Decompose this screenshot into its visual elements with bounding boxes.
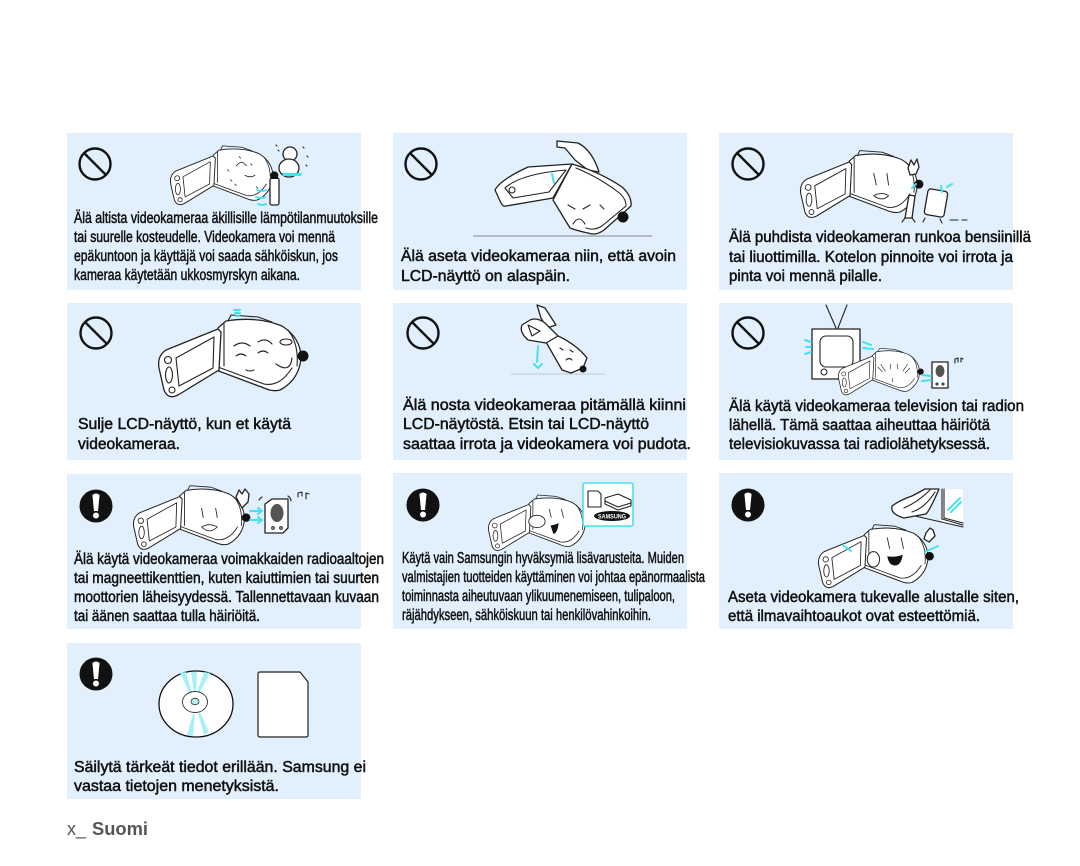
illustration: sleepy camera [159, 310, 308, 397]
text: caution 8: toiminnasta aiheutuvaan ylikuumenemiseen, tulipaloon, [402, 588, 675, 605]
icon: prohibition sign [732, 318, 764, 348]
illustration: memory card [258, 672, 308, 737]
text: caution 9 [728, 589, 1019, 625]
text: warning 1: epäkuntoon ja käyttäjä voi saada sähköiskun, jos [74, 248, 338, 265]
text: warning 6: Älä käytä videokameraa television tai radion [729, 398, 1024, 415]
text: warning 1: tai suurelle kosteudelle. Videokamera voi mennä [74, 229, 335, 246]
text: warning 3 [729, 229, 1031, 285]
illustration: camera with snowman and bottle [170, 145, 308, 205]
text: caution 7: tai äänen saattaa tulla häiriöitä. [74, 608, 260, 625]
text: warning 4: videokameraa. [78, 436, 180, 453]
icon: prohibition sign [406, 148, 436, 180]
text: warning 6: televisiokuvassa tai radiolähetyksessä. [729, 436, 990, 453]
footer: page label: Suomi [92, 819, 148, 839]
panel: approved accessories caution [393, 473, 705, 629]
text: warning 3: Älä puhdista videokameran runkoa bensiinillä [729, 229, 1031, 246]
text: warning 4: Sulje LCD-näyttö, kun et käytä [78, 416, 291, 433]
text: warning 5 [403, 397, 691, 453]
text: caution 8: Käytä vain Samsungin hyväksymiä lisävarusteita. Muiden [402, 550, 684, 567]
illustration: camera upside down on ground [473, 141, 652, 236]
icon: exclamation sign [406, 488, 440, 522]
icon: prohibition sign [80, 318, 112, 348]
illustration: disc [159, 671, 233, 737]
text: caution 7: tai magneettikenttien, kuten kaiuttimien tai suurten [74, 570, 379, 587]
text: caution 10: Säilytä tärkeät tiedot erillään. Samsung ei [74, 759, 366, 776]
text: caution 9: Aseta videokamera tukevalle alustalle siten, [728, 589, 1019, 606]
panel: lifting by LCD warning [393, 303, 691, 460]
illustration: camera with Samsung accessories: SAMSUNG [598, 514, 626, 520]
illustration: camera lifted by LCD [511, 305, 605, 374]
text: warning 2: Älä aseta videokameraa niin, että avoin [401, 248, 676, 265]
text: caution 8: valmistajien tuotteiden käyttäminen voi johtaa epänormaalista [402, 569, 705, 586]
illustration: camera with solvent bottles [801, 151, 967, 223]
illustration: camera with Samsung accessories [488, 483, 633, 550]
panel: temperature and humidity warning [67, 133, 378, 290]
text: warning 1: Älä altista videokameraa äkillisille lämpötilanmuutoksille [74, 210, 378, 227]
text: caution 7: moottorien läheisyydessä. Tallennettavaan kuvaan [74, 589, 379, 606]
text: warning 6 [729, 398, 1024, 453]
text: caution 10 [74, 759, 366, 795]
footer: page label [67, 819, 148, 840]
text: warning 1: kameraa käytetään ukkosmyrskyn aikana. [74, 267, 300, 284]
text: caution 9: että ilmavaihtoaukot ovat esteettömiä. [728, 608, 980, 625]
icon: exclamation sign [732, 488, 764, 522]
text: caution 7: Älä käytä videokameraa voimakkaiden radioaaltojen [74, 551, 384, 568]
text: caution 7 [74, 551, 384, 625]
text: warning 5: saattaa irrota ja videokamera voi pudota. [403, 436, 691, 453]
footer: page label: x_ [67, 819, 87, 840]
text: warning 6: lähellä. Tämä saattaa aiheuttaa häiriötä [729, 417, 990, 434]
text: warning 4 [78, 416, 291, 453]
panel: cleaning warning [719, 133, 1031, 290]
text: caution 8 [402, 550, 705, 624]
text: caution 10: vastaa tietojen menetyksistä. [74, 778, 279, 795]
text: warning 3: tai liuottimilla. Kotelon pinnoite voi irrota ja [729, 249, 1013, 266]
icon: exclamation sign [80, 490, 112, 522]
panel: TV and radio warning [719, 303, 1024, 460]
text: warning 5: LCD-näytöstä. Etsin tai LCD-näyttö [403, 416, 649, 433]
panel: close LCD advice [67, 303, 361, 460]
panel: radio waves caution [67, 474, 384, 629]
text: warning 2 [401, 248, 676, 285]
text: warning 3: pinta voi mennä pilalle. [729, 268, 882, 285]
text: warning 5: Älä nosta videokameraa pitämällä kiinni [403, 397, 686, 414]
panel: LCD facing down warning [393, 133, 687, 290]
text: caution 8: räjähdykseen, sähköiskuun tai henkilövahinkoihin. [402, 607, 651, 624]
illustration: television, camera and speaker [805, 305, 963, 395]
icon: prohibition sign [732, 148, 764, 180]
illustration: camera near loudspeaker [133, 486, 309, 549]
icon: exclamation sign [80, 658, 112, 690]
panel: ventilation caution [719, 473, 1019, 629]
illustration: camera by window and curtain [818, 489, 963, 588]
icon: prohibition sign [80, 148, 110, 180]
panel: data backup caution [67, 643, 366, 799]
text: warning 1 [74, 210, 378, 284]
text: warning 2: LCD-näyttö on alaspäin. [401, 268, 570, 285]
icon: prohibition sign [408, 318, 438, 348]
